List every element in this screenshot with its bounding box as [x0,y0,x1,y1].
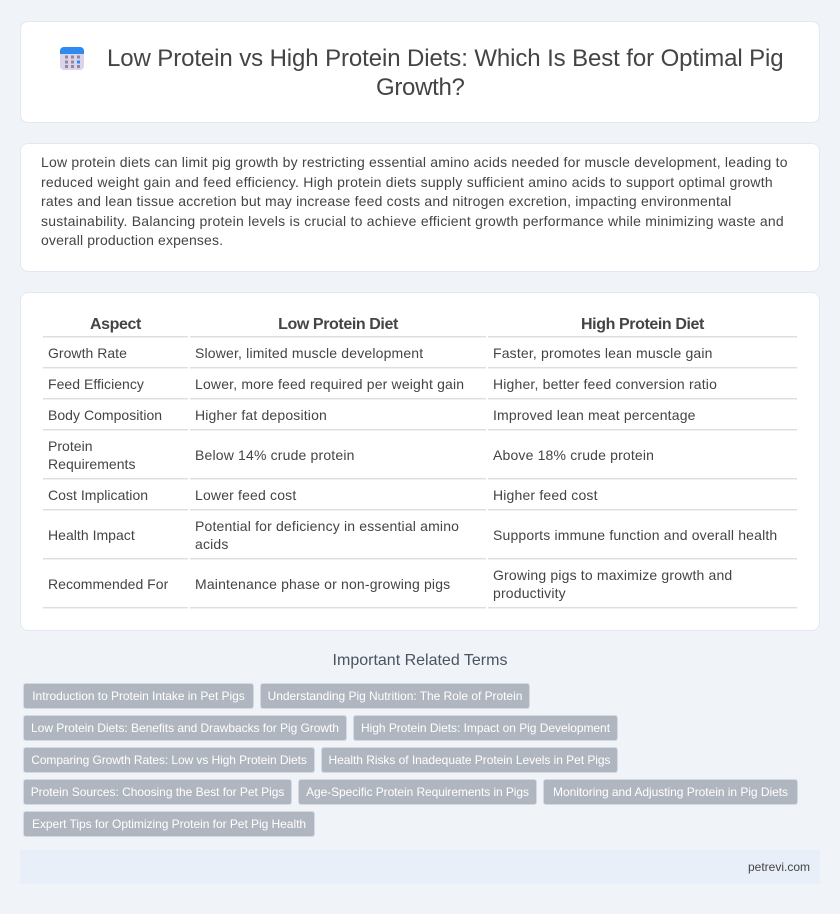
header panel [20,21,820,123]
comparison table: Body Composition [48,407,162,423]
related term tags: Understanding Pig Nutrition: The Role of Protein [268,689,522,703]
footer [20,850,820,884]
comparison table: Maintenance phase or non-growing pigs [195,576,450,592]
heading: important related terms: Important Related Terms [333,652,507,669]
comparison table [43,316,797,609]
text block: description: overall production expenses. [41,232,223,248]
footer: site name: petrevi.com [748,860,810,874]
comparison table: Slower, limited muscle development [195,345,423,361]
comparison table: Growing pigs to maximize growth and [493,567,732,583]
text block: description: sustainability. Balancing protein levels is crucial to achieve efficient growth performance while minimizing waste and [41,213,784,229]
text block: description: rates and lean tissue accretion but may increase feed costs and nitrogen excretion, impacting environmental [41,193,731,209]
related term tags: Comparing Growth Rates: Low vs High Protein Diets [31,753,307,767]
related term tags: Protein Sources: Choosing the Best for Pet Pigs [31,785,284,799]
comparison table: Faster, promotes lean muscle gain [493,345,713,361]
panel: comparison table [20,292,820,631]
comparison table: Growth Rate [48,345,127,361]
comparison table: Improved lean meat percentage [493,407,696,423]
title: Low Protein vs High Protein Diets: Which Is Best for Optimal Pig [107,45,784,72]
comparison table: High Protein Diet [581,316,704,333]
panel: description [20,143,820,272]
text block: description: reduced weight gain and feed efficiency. High protein diets supply sufficient amino acids to support optimal growth [41,174,773,190]
related term tags: Health Risks of Inadequate Protein Levels in Pet Pigs [328,753,611,767]
comparison table: Above 18% crude protein [493,447,654,463]
related term tags: Monitoring and Adjusting Protein in Pig Diets [553,785,788,799]
text block: description [41,154,788,248]
comparison table: Potential for deficiency in essential amino [195,518,459,534]
comparison table: Supports immune function and overall health [493,527,777,543]
comparison table: Low Protein Diet [278,316,398,333]
related term tags: Low Protein Diets: Benefits and Drawbacks for Pig Growth [31,721,339,735]
comparison table: Requirements [48,456,136,472]
title: Growth? [376,74,465,101]
comparison table: Below 14% crude protein [195,447,355,463]
comparison table: Aspect [90,316,141,333]
comparison table: Higher, better feed conversion ratio [493,376,717,392]
comparison table: Protein [48,438,93,454]
comparison table: Feed Efficiency [48,376,144,392]
icon: calendar [60,47,84,70]
comparison table: Recommended For [48,576,168,592]
related term tags: Expert Tips for Optimizing Protein for Pet Pig Health [32,817,306,831]
text block: description: Low protein diets can limit pig growth by restricting essential amino acids needed for muscle development, leading to [41,154,788,170]
comparison table: acids [195,536,229,552]
related term tags: Introduction to Protein Intake in Pet Pigs [32,689,245,703]
related term tags: Age-Specific Protein Requirements in Pigs [306,785,529,799]
related term tags: High Protein Diets: Impact on Pig Development [361,721,610,735]
related term tags [23,683,798,837]
comparison table: productivity [493,585,566,601]
comparison table: Higher fat deposition [195,407,327,423]
comparison table: Higher feed cost [493,487,598,503]
comparison table: Health Impact [48,527,135,543]
comparison table: Cost Implication [48,487,148,503]
comparison table: Lower, more feed required per weight gain [195,376,464,392]
title [107,45,784,101]
comparison table: Lower feed cost [195,487,296,503]
